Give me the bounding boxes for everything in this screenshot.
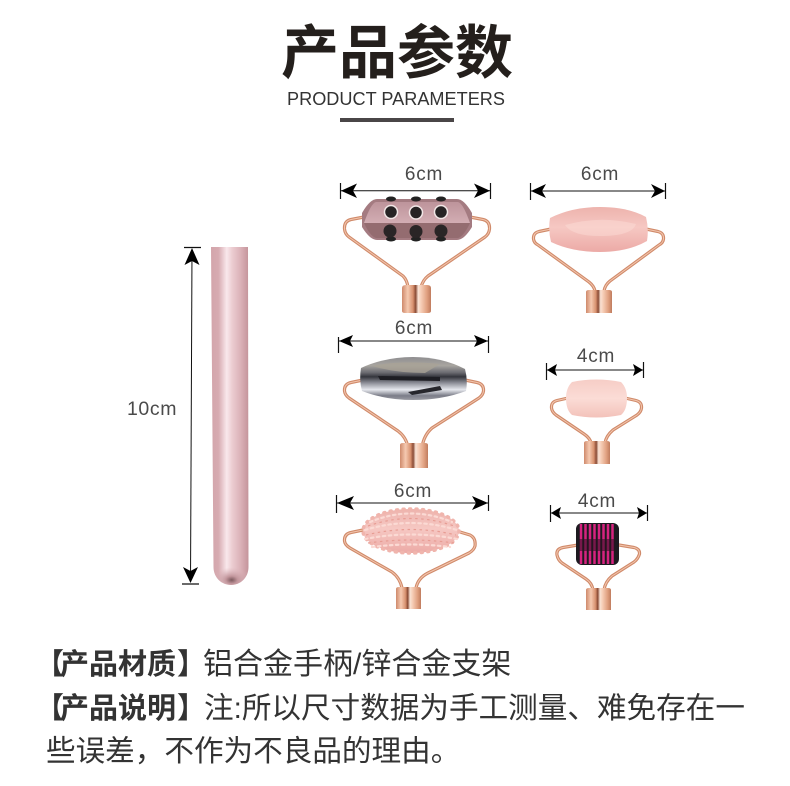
- dimension: 6cm: [530, 164, 666, 200]
- title: 产品参数: [281, 21, 513, 86]
- roller 6: micro-needle derma roller: [550, 491, 648, 610]
- roller head: [549, 207, 648, 252]
- wire frame: [551, 398, 642, 443]
- wire frame: [344, 380, 484, 447]
- base: [584, 441, 610, 464]
- dimension: 10cm: 10cm: [127, 398, 177, 420]
- dimension: 6cm: 6cm: [394, 481, 432, 502]
- roller head: [362, 199, 472, 240]
- studs: [384, 196, 448, 242]
- roller 1: black dotted massage head: [340, 164, 490, 313]
- base: [586, 588, 611, 610]
- handle with 10cm dimension: [127, 247, 248, 585]
- description text: 】: [177, 693, 206, 725]
- material line: 铝合金手柄/锌合金支架: [203, 648, 511, 681]
- dimension: 10cm: [127, 248, 201, 584]
- roller head: [360, 357, 467, 400]
- roller head: [363, 509, 459, 553]
- description text: 【: [35, 693, 64, 725]
- material line: 】: [177, 649, 206, 681]
- material line: [35, 648, 511, 681]
- roller 3: metal oval: [338, 318, 488, 468]
- roller 2: large rose quartz: [530, 164, 666, 313]
- wire frame: [557, 545, 640, 590]
- description text: 些误差，不作为不良品的理由。: [46, 735, 460, 768]
- description text: 产品说明: [60, 692, 176, 725]
- roller 5: bumpy rose quartz: [336, 481, 488, 609]
- dimension: 6cm: [338, 318, 488, 353]
- dimension: 6cm: 6cm: [405, 164, 443, 185]
- roller head: [566, 380, 627, 418]
- material line: 【: [35, 649, 64, 681]
- dimension: 4cm: 4cm: [577, 346, 615, 367]
- dimension: 6cm: 6cm: [395, 318, 433, 339]
- wire frame: [344, 217, 490, 287]
- subtitle: PRODUCT PARAMETERS: [287, 89, 505, 109]
- title underline: [340, 118, 454, 122]
- wire frame: [533, 229, 664, 291]
- description text: 注:所以尺寸数据为手工测量、难免存在一: [204, 692, 745, 725]
- material line: 产品材质: [60, 648, 176, 681]
- description text: [35, 692, 745, 768]
- dimension: 4cm: 4cm: [578, 491, 616, 512]
- base: [400, 443, 428, 468]
- base: [396, 587, 421, 609]
- handle: [211, 247, 248, 585]
- roller head: [576, 523, 619, 565]
- base: [586, 290, 612, 313]
- dimension: 6cm: 6cm: [581, 164, 619, 185]
- wire frame: [344, 530, 475, 588]
- dimension: 6cm: [340, 164, 490, 199]
- dimension: 6cm: [336, 481, 488, 513]
- base: [402, 285, 431, 313]
- roller 4: small rose quartz: [546, 346, 644, 464]
